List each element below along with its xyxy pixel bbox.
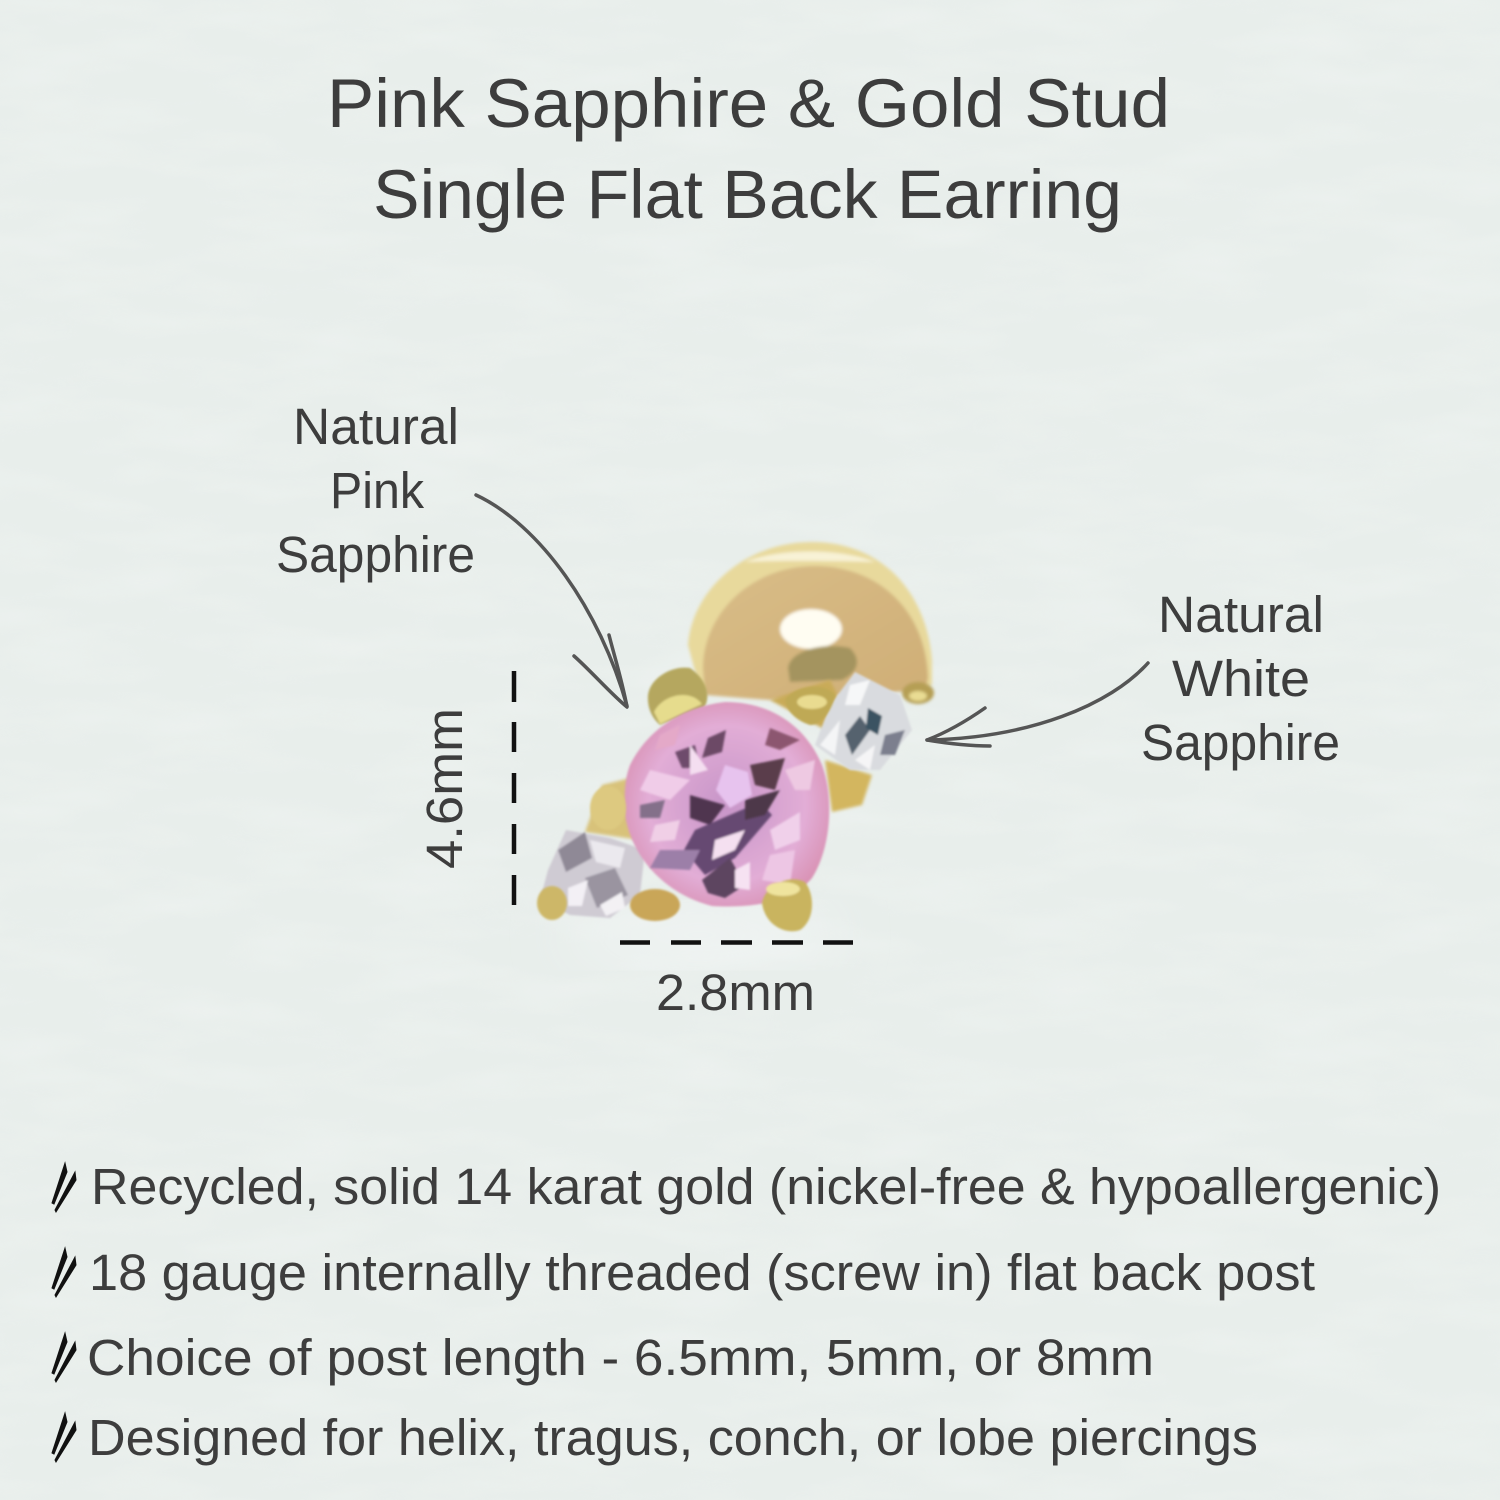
label: natural white sapphire: White bbox=[1172, 650, 1310, 707]
title bbox=[327, 65, 1170, 233]
bullet item: gauge: 18 gauge internally threaded (screw in) flat back post bbox=[89, 1244, 1315, 1301]
label: natural pink sapphire bbox=[276, 398, 475, 583]
pink sapphire bbox=[625, 702, 829, 906]
title: Single Flat Back Earring bbox=[373, 156, 1122, 233]
flat back disc bbox=[688, 542, 934, 704]
arrow: to white sapphire bbox=[927, 663, 1148, 746]
label: natural pink sapphire: Sapphire bbox=[276, 526, 475, 583]
label: natural white sapphire: Natural bbox=[1158, 586, 1324, 643]
earring photo bbox=[537, 542, 934, 957]
white sapphire bbox=[815, 672, 912, 770]
height dimension line bbox=[512, 671, 516, 905]
label: natural white sapphire bbox=[1141, 586, 1340, 771]
lower-left stone bbox=[540, 830, 645, 918]
label: natural white sapphire: Sapphire bbox=[1141, 714, 1340, 771]
bullet item: post length: Choice of post length - 6.5mm, 5mm, or 8mm bbox=[87, 1329, 1154, 1386]
arrow: to pink sapphire bbox=[476, 495, 627, 707]
title: Pink Sapphire & Gold Stud bbox=[327, 65, 1170, 142]
soft shadow bbox=[570, 913, 830, 957]
height label: 4.6mm bbox=[416, 708, 473, 869]
width dimension line bbox=[620, 940, 853, 945]
feature list bbox=[52, 1158, 1441, 1466]
bullet item: piercings: Designed for helix, tragus, conch, or lobe piercings bbox=[88, 1409, 1258, 1466]
bullet item: gold: Recycled, solid 14 karat gold (nickel-free & hypoallergenic) bbox=[91, 1158, 1441, 1215]
left back prong bbox=[648, 668, 707, 725]
gold setting bbox=[585, 680, 872, 840]
front prongs bbox=[537, 687, 835, 931]
label: natural pink sapphire: Pink bbox=[330, 462, 424, 519]
width label: 2.8mm bbox=[656, 964, 815, 1021]
label: natural pink sapphire: Natural bbox=[293, 398, 459, 455]
